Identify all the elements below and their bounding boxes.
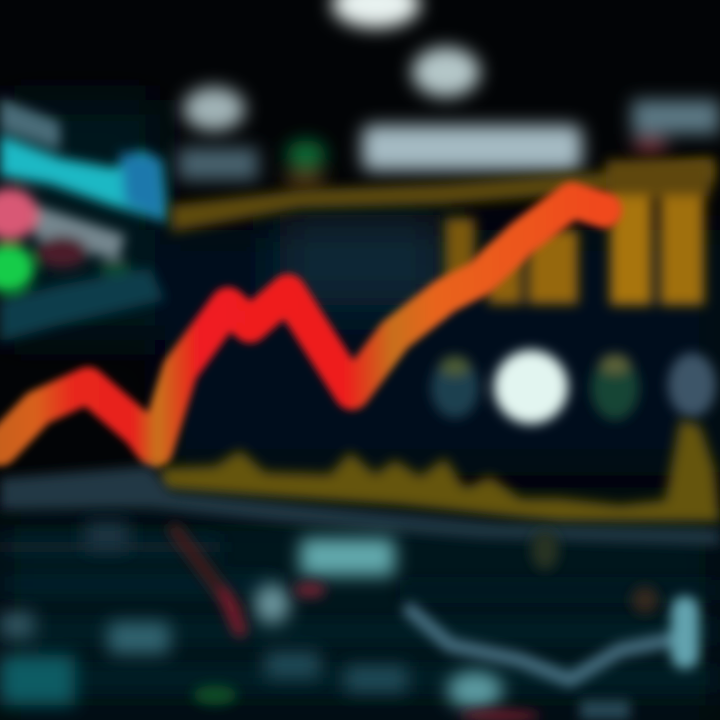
middle status icons	[431, 350, 716, 424]
lower table rows	[0, 540, 720, 684]
red line chart	[0, 200, 604, 450]
top gold band	[170, 158, 715, 232]
left cyan ribbon and legend	[0, 98, 168, 342]
gold volume strip	[160, 420, 720, 522]
lower cyan labels	[0, 522, 503, 709]
top header bars	[178, 100, 720, 188]
grey divider band	[0, 466, 720, 545]
gold bars right	[445, 160, 711, 305]
lower trend line	[175, 530, 685, 680]
lower coloured markers	[193, 530, 659, 720]
top white circles	[183, 0, 480, 131]
